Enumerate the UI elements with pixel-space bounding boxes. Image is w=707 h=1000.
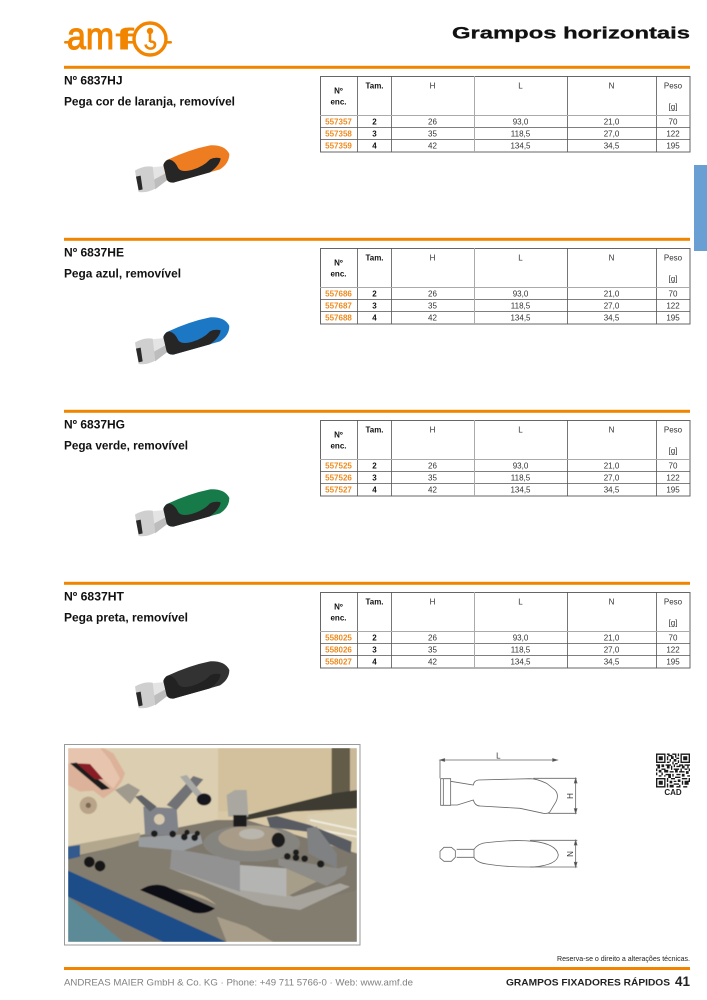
disclaimer: Reserva-se o direito a alterações técnicas. — [557, 954, 690, 963]
footer: page number: 41 — [675, 973, 690, 989]
subheading: Pega cor de laranja, removível — [64, 94, 235, 108]
table rows: 35 — [428, 646, 437, 654]
table rows — [325, 634, 680, 666]
table rows: 34,5 — [604, 314, 620, 322]
subheading: Pega azul, removível — [64, 266, 181, 280]
table rows: 134,5 — [510, 142, 531, 150]
table header: H — [430, 254, 436, 262]
table: dimensions — [320, 248, 690, 324]
table rows: 21,0 — [604, 634, 620, 642]
table header: Peso — [664, 598, 683, 606]
table rows: 557358 — [325, 130, 352, 138]
top view — [440, 841, 558, 867]
table header: L — [518, 254, 523, 262]
table rows: 42 — [428, 142, 437, 150]
table rows: 4 — [372, 314, 377, 322]
table header: [g] — [669, 274, 677, 284]
table rows: 195 — [666, 486, 680, 494]
table header: L — [518, 82, 523, 90]
table rows: 3 — [372, 474, 377, 482]
table rows: 93,0 — [513, 634, 529, 642]
table rows: 21,0 — [604, 118, 620, 126]
title: Grampos horizontais — [452, 24, 690, 42]
table rows: 70 — [669, 290, 678, 298]
table rows: 557357 — [325, 118, 352, 126]
table rows: 557525 — [325, 462, 352, 470]
table rows: 4 — [372, 658, 377, 666]
table rows: 26 — [428, 118, 437, 126]
table rows: 558025 — [325, 634, 352, 642]
table rows: 35 — [428, 302, 437, 310]
heading: article number: Nº 6837HE — [64, 246, 124, 260]
table header: enc. — [330, 270, 347, 278]
table rows: 557687 — [325, 302, 352, 310]
dimension N: N — [566, 851, 575, 857]
logo: amf: am — [67, 16, 114, 58]
panel: 6837HE blue handle — [64, 238, 690, 364]
table rows: 2 — [372, 634, 377, 642]
icon: orange handle — [135, 145, 229, 192]
table header: enc. — [330, 614, 347, 622]
icon: black handle — [135, 661, 229, 708]
table rows: 2 — [372, 118, 377, 126]
table rows: 27,0 — [604, 130, 620, 138]
logo: amf: f — [116, 24, 135, 56]
QR caption: CAD — [664, 788, 682, 797]
table rows: 27,0 — [604, 646, 620, 654]
table rows: 557359 — [325, 142, 352, 150]
table header: H — [430, 426, 436, 434]
table rows: 195 — [666, 658, 680, 666]
footer: company contact: ANDREAS MAIER GmbH & Co. KG · Phone: +49 711 5766-0 · Web: www.amf.de — [64, 978, 413, 988]
table rows: 34,5 — [604, 658, 620, 666]
table header — [330, 598, 683, 628]
table rows: 122 — [666, 130, 680, 138]
table rows: 35 — [428, 474, 437, 482]
table rows: 3 — [372, 302, 377, 310]
table rows: 3 — [372, 646, 377, 654]
table rows: 558027 — [325, 658, 352, 666]
heading: article number: Nº 6837HJ — [64, 74, 122, 88]
table header — [330, 254, 683, 284]
table header: N — [609, 598, 615, 606]
table rows: 34,5 — [604, 486, 620, 494]
table rows: 21,0 — [604, 290, 620, 298]
table rows: 118,5 — [511, 302, 531, 310]
side tab — [694, 165, 707, 251]
table rows: 118,5 — [511, 130, 531, 138]
table rows: 118,5 — [511, 646, 531, 654]
table header: enc. — [330, 98, 347, 106]
table: dimensions — [320, 76, 690, 152]
table header: Tam. — [365, 598, 384, 606]
table rows: 134,5 — [510, 486, 531, 494]
table: dimensions — [320, 592, 690, 668]
table rows: 93,0 — [513, 118, 529, 126]
table rows: 2 — [372, 462, 377, 470]
table header: Nº — [334, 86, 343, 96]
photo: clamps on fixture plate — [64, 744, 360, 945]
table rows: 122 — [666, 302, 680, 310]
table header — [330, 426, 683, 456]
side view — [441, 779, 557, 813]
logo: amf — [64, 16, 172, 58]
table rows: 35 — [428, 130, 437, 138]
table header: N — [609, 426, 615, 434]
table rows: 122 — [666, 646, 680, 654]
table rows: 558026 — [325, 646, 352, 654]
table header: L — [518, 426, 523, 434]
table rows: 42 — [428, 658, 437, 666]
table rows: 42 — [428, 314, 437, 322]
table rows: 34,5 — [604, 142, 620, 150]
table rows: 93,0 — [513, 462, 529, 470]
table rows: 134,5 — [510, 314, 531, 322]
footer rule — [64, 967, 690, 970]
table header: Tam. — [365, 82, 384, 90]
table header: Nº — [334, 430, 343, 440]
table rows: 195 — [666, 314, 680, 322]
table rows: 26 — [428, 462, 437, 470]
table rows: 42 — [428, 486, 437, 494]
table header: Nº — [334, 258, 343, 268]
table rows: 4 — [372, 486, 377, 494]
table rows: 27,0 — [604, 474, 620, 482]
table rows: 70 — [669, 118, 678, 126]
footer: section name: GRAMPOS FIXADORES RÁPIDOS — [506, 978, 670, 988]
table rows — [325, 290, 680, 322]
table rows: 2 — [372, 290, 377, 298]
table rows: 122 — [666, 474, 680, 482]
table rows: 21,0 — [604, 462, 620, 470]
table rows: 557688 — [325, 314, 352, 322]
heading: article number: Nº 6837HG — [64, 418, 125, 432]
icon: blue handle — [135, 317, 229, 364]
table rows: 3 — [372, 130, 377, 138]
table header: Peso — [664, 82, 683, 90]
table rows: 118,5 — [511, 474, 531, 482]
table rows: 557527 — [325, 486, 352, 494]
panel: 6837HT black handle — [64, 582, 690, 708]
heading: article number: Nº 6837HT — [64, 590, 125, 604]
table header: [g] — [669, 102, 677, 112]
table header — [330, 82, 683, 112]
QR code — [656, 754, 690, 788]
table header: H — [430, 598, 436, 606]
dimension H: H — [566, 793, 575, 799]
table rows: 134,5 — [510, 658, 531, 666]
table header: Tam. — [365, 426, 384, 434]
table rows — [325, 462, 680, 494]
table header: enc. — [330, 442, 347, 450]
table: dimensions — [320, 420, 690, 496]
table rows: 27,0 — [604, 302, 620, 310]
table rows: 195 — [666, 142, 680, 150]
table rows: 26 — [428, 290, 437, 298]
subheading: Pega preta, removível — [64, 610, 188, 624]
table rows: 4 — [372, 142, 377, 150]
table header: [g] — [669, 446, 677, 456]
table header: [g] — [669, 618, 677, 628]
table rows — [325, 118, 680, 150]
table header: N — [609, 254, 615, 262]
table rows: 557526 — [325, 474, 352, 482]
table rows: 70 — [669, 634, 678, 642]
table rows: 93,0 — [513, 290, 529, 298]
panel: 6837HJ orange handle — [64, 66, 690, 192]
subheading: Pega verde, removível — [64, 438, 188, 452]
table rows: 70 — [669, 462, 678, 470]
table header: Nº — [334, 602, 343, 612]
table header: L — [518, 598, 523, 606]
table header: Tam. — [365, 254, 384, 262]
table header: Peso — [664, 254, 683, 262]
dimension L: L — [496, 751, 501, 760]
table header: H — [430, 82, 436, 90]
table header: N — [609, 82, 615, 90]
table rows: 26 — [428, 634, 437, 642]
panel: 6837HG green handle — [64, 410, 690, 536]
technical drawing: side and top views — [440, 751, 577, 867]
table header: Peso — [664, 426, 683, 434]
icon: green handle — [135, 489, 229, 536]
table rows: 557686 — [325, 290, 352, 298]
